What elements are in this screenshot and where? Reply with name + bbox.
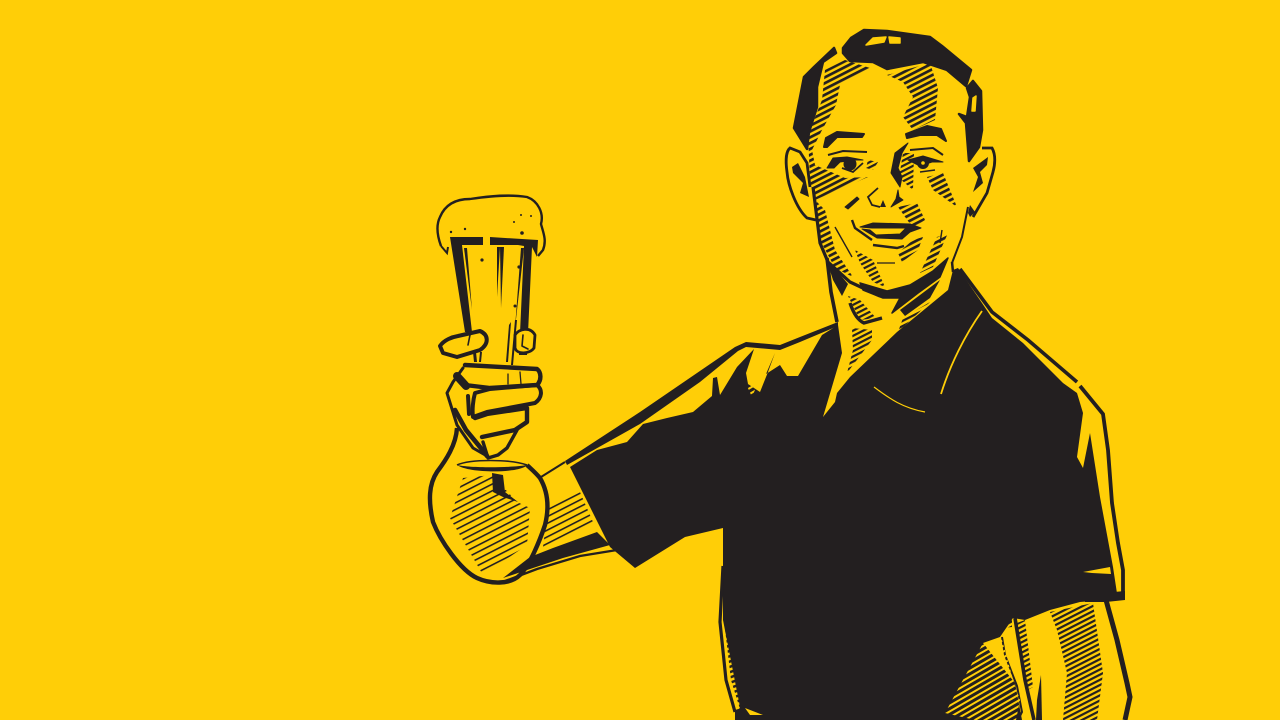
eyes (827, 148, 943, 172)
forearm (430, 428, 617, 583)
finger two (473, 385, 541, 417)
glass base (457, 460, 527, 465)
shoulder highlight hatching (747, 373, 760, 397)
thumb (440, 331, 487, 357)
foam (437, 196, 545, 256)
fingertip (515, 329, 535, 353)
head (786, 30, 995, 313)
knuckle shadow (457, 376, 466, 386)
forearm hatching (450, 475, 530, 575)
heel of hand (483, 430, 517, 458)
beer glass (437, 196, 545, 502)
ears (786, 148, 816, 220)
face outline (813, 187, 880, 296)
sleeve hem (1085, 567, 1125, 602)
eyebrows (824, 126, 946, 147)
mouth (835, 220, 942, 263)
finger three (475, 408, 527, 437)
torso left hatching (720, 566, 763, 720)
hair highlights (866, 37, 976, 111)
shirt (565, 268, 1125, 720)
right arm (945, 600, 1130, 720)
neck (826, 258, 953, 373)
collar crease lines (941, 311, 982, 394)
sleeve back outline (960, 269, 1077, 382)
arm shadow (503, 532, 610, 578)
palm (447, 368, 487, 456)
shoulder outline line (565, 322, 838, 465)
glass edges (450, 237, 483, 332)
hair (794, 30, 982, 161)
nose (845, 143, 908, 209)
finger one (465, 365, 540, 388)
face hatching (808, 60, 957, 287)
hand (440, 329, 541, 458)
